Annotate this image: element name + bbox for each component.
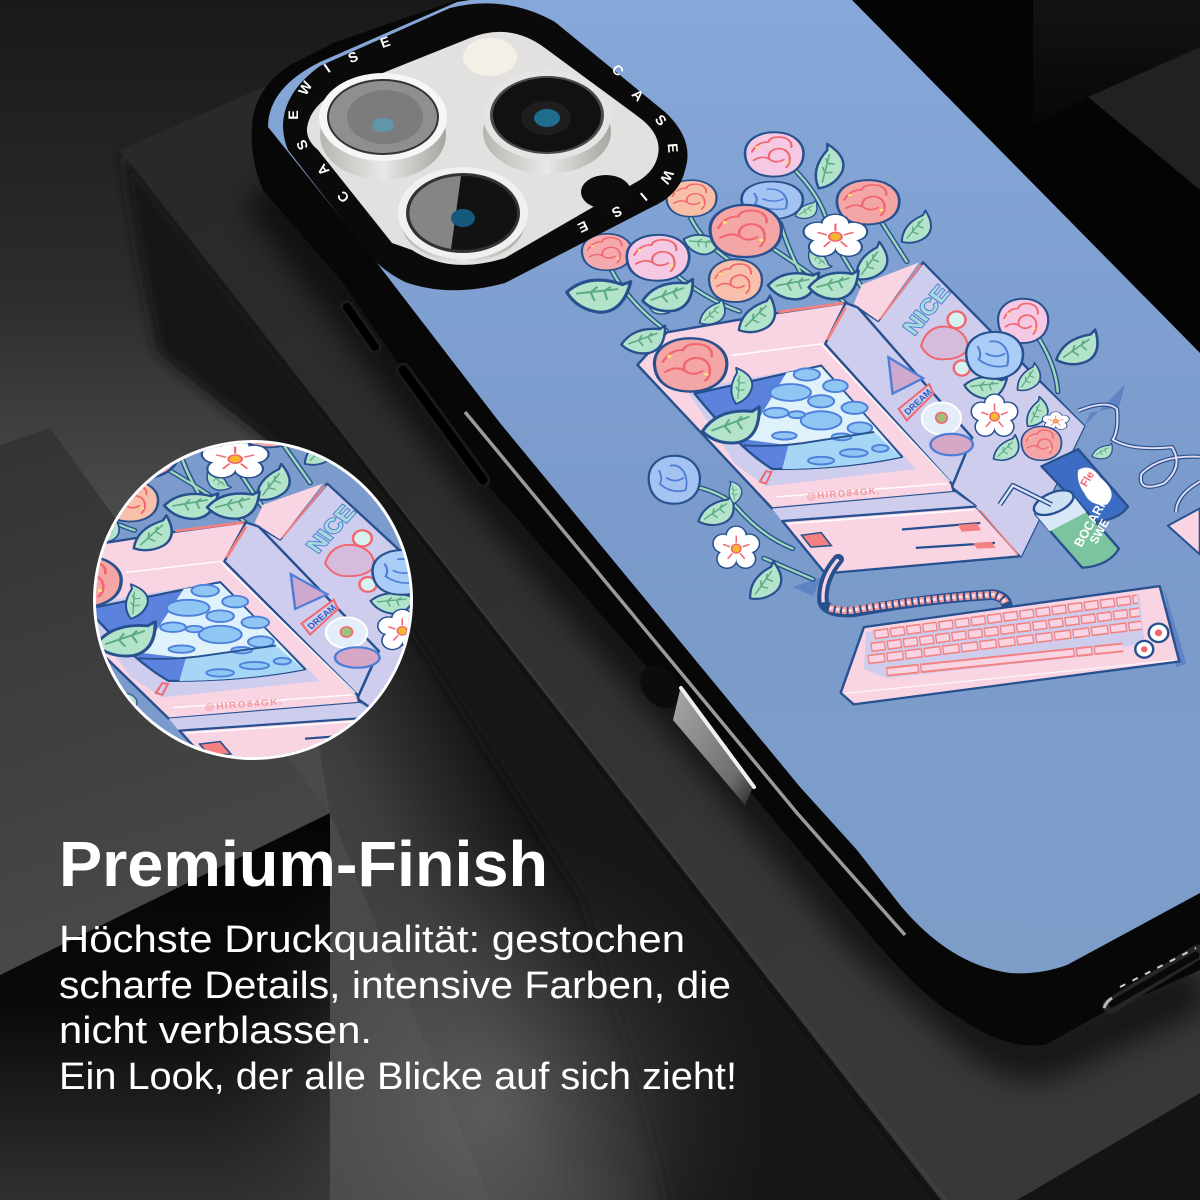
ring lettering: C	[334, 188, 352, 206]
microphone sensor	[581, 175, 631, 209]
ring lettering	[285, 33, 681, 236]
lens top right	[483, 70, 611, 174]
illustration: retro computer with flowers	[564, 132, 1200, 704]
camera glass	[307, 32, 659, 265]
camera island	[283, 3, 688, 290]
ring lettering: W	[656, 167, 677, 187]
charging port	[1104, 948, 1198, 1008]
body text: scharfe Details, intensive Farben, die	[59, 965, 731, 1007]
ring lettering: E	[378, 33, 392, 51]
body text	[59, 919, 737, 1098]
body text: Ein Look, der alle Blicke auf sich zieht!	[59, 1056, 737, 1098]
ring lettering: C	[609, 61, 627, 79]
magnified detail circle	[93, 440, 413, 760]
ring lettering: S	[652, 111, 670, 129]
ring lettering: I	[637, 190, 651, 204]
ring lettering: E	[575, 218, 591, 236]
ring lettering: W	[295, 78, 316, 98]
ring lettering: S	[293, 137, 311, 153]
body text: Höchste Druckqualität: gestochen	[59, 919, 685, 961]
ring lettering: A	[629, 86, 647, 104]
phone case body	[252, 0, 1200, 1046]
ring lettering: S	[346, 48, 360, 66]
body text: nicht verblassen.	[59, 1010, 372, 1052]
case edge highlight	[465, 412, 905, 935]
ring lettering: A	[314, 161, 332, 179]
ring lettering: I	[321, 60, 333, 76]
lens bottom	[398, 167, 528, 262]
side buttons	[347, 307, 754, 805]
ring lettering: E	[665, 143, 681, 153]
lens top left	[319, 73, 447, 180]
phone back panel with blue finish	[268, 0, 1200, 973]
heading: Premium-Finish	[59, 828, 548, 900]
flash	[463, 38, 517, 76]
ring lettering: E	[285, 110, 301, 120]
ring lettering: S	[609, 203, 625, 221]
phone shadow	[263, 190, 1200, 1056]
